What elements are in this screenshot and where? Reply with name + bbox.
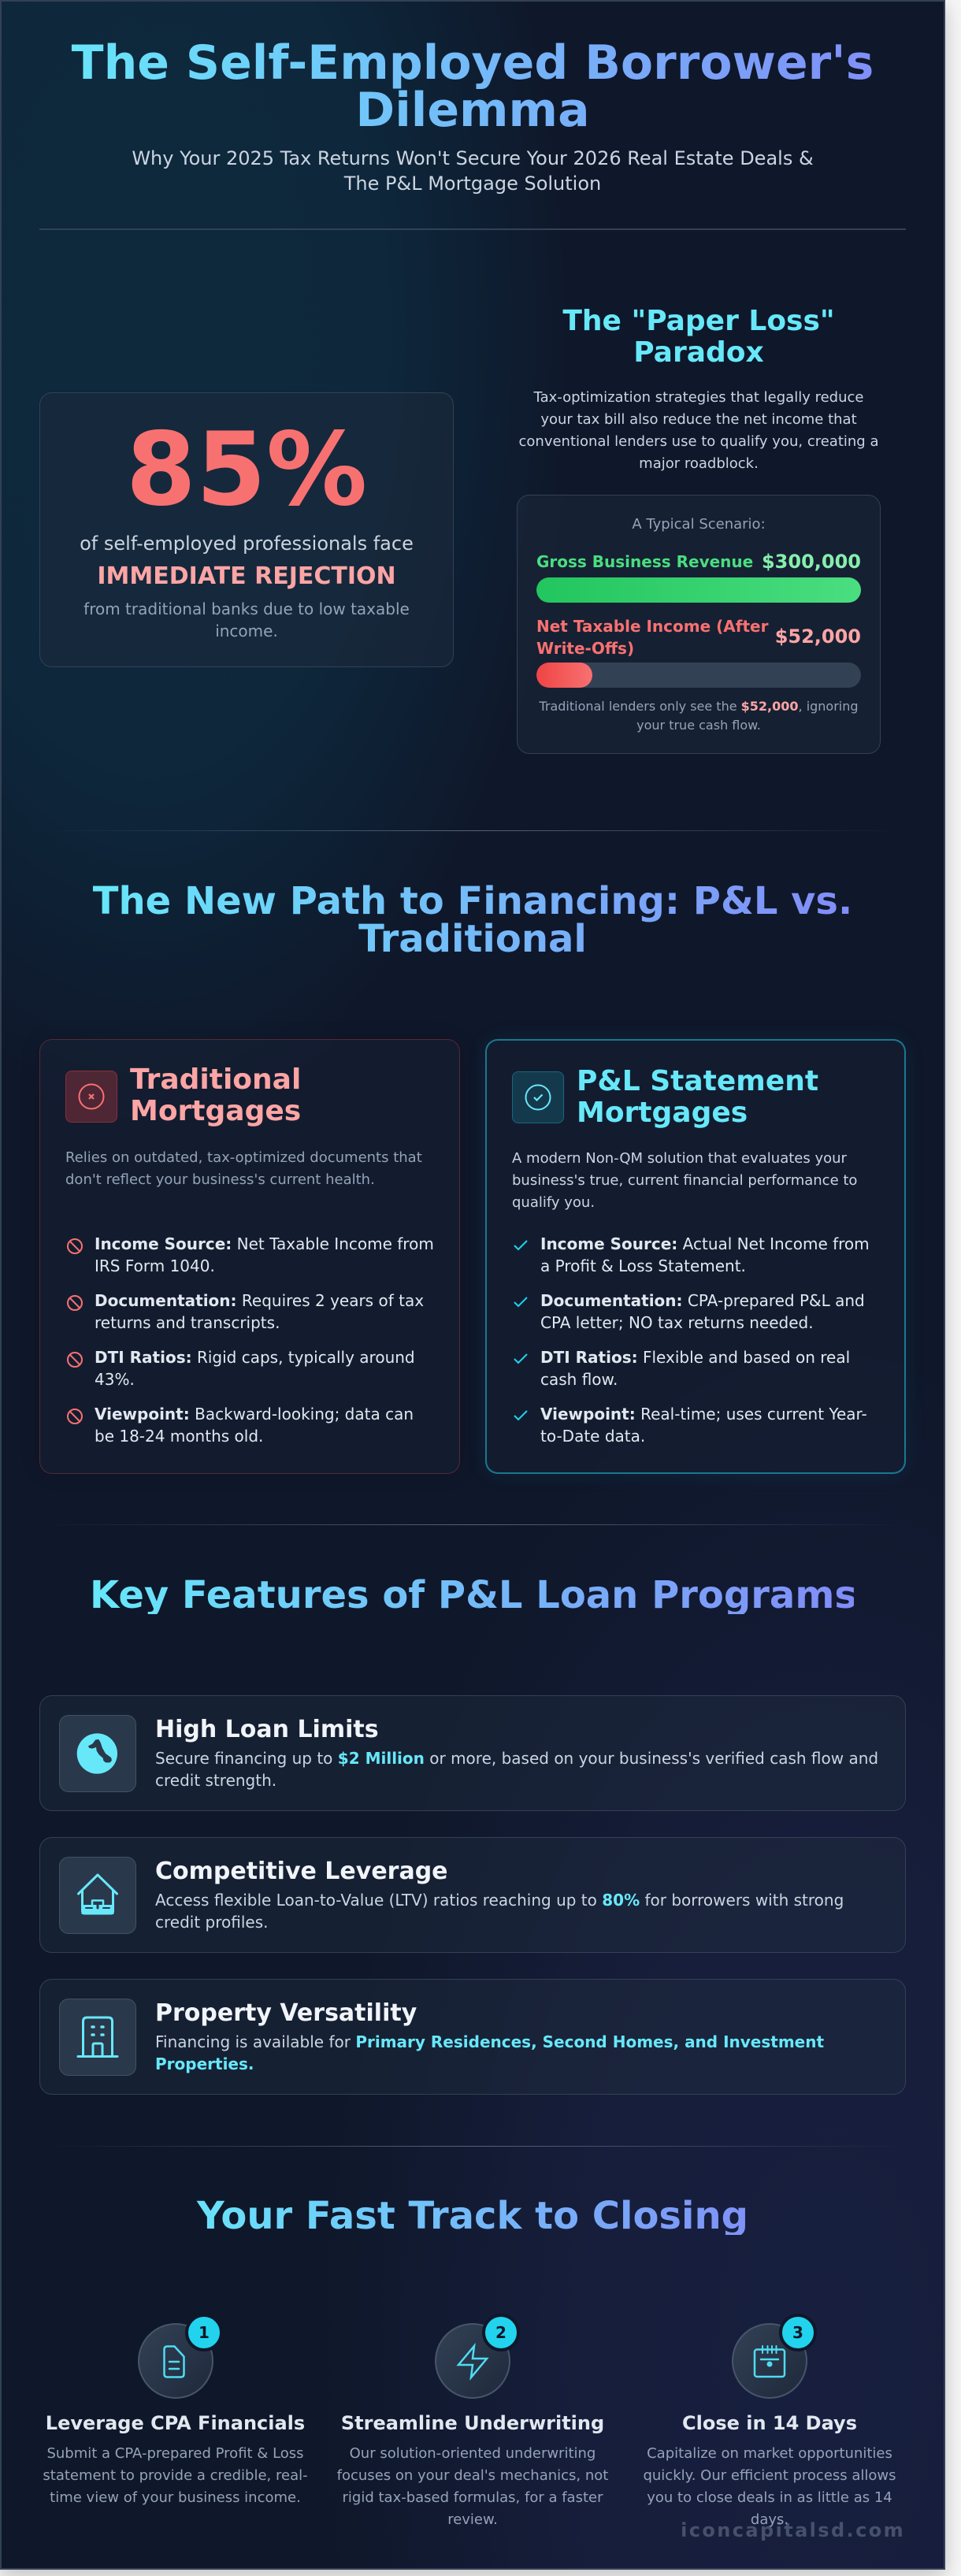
heading: new path to financing: The New Path to Financing: P&L vs.	[93, 879, 852, 923]
gross revenue value: $300,000	[762, 551, 861, 573]
feature description	[155, 1891, 844, 1932]
list item: income source	[540, 1234, 870, 1275]
net income label: Net Taxable Income (After	[536, 617, 768, 636]
feature title: Competitive Leverage	[155, 1858, 448, 1885]
statistic note	[83, 599, 410, 640]
list item: dti ratios	[95, 1348, 415, 1389]
feature description: Properties.	[155, 2054, 254, 2073]
scenario footnote: Traditional lenders only see the $52,000, ignoring	[539, 699, 859, 714]
gross revenue bar	[536, 577, 861, 603]
icon: check circle	[512, 1071, 564, 1123]
card title	[577, 1065, 818, 1129]
icon: check	[514, 1297, 528, 1308]
card description: A modern Non-QM solution that evaluates your	[512, 1150, 847, 1167]
heading: paper loss paradox: The "Paper Loss"	[562, 305, 835, 337]
step 3 badge	[779, 2314, 817, 2351]
panel: typical scenario	[517, 495, 881, 754]
title: Dilemma	[355, 83, 590, 138]
card title: P&L Statement	[577, 1065, 818, 1097]
list item: viewpoint: to-Date data.	[540, 1427, 645, 1446]
step 2 badge	[482, 2314, 520, 2351]
feature description	[155, 1749, 878, 1790]
icon: ban	[67, 1352, 83, 1368]
panel: traditional mortgages	[39, 1039, 460, 1474]
list item: dti ratios: cash flow.	[540, 1370, 618, 1389]
text: paradox explanation	[518, 389, 878, 472]
heading: fast track: Your Fast Track to Closing	[197, 2194, 748, 2238]
step 3 title: Close in 14 Days	[682, 2412, 857, 2434]
step 2 icon circle	[435, 2323, 510, 2399]
list item: documentation: Documentation: CPA-prepared P&L and	[540, 1291, 865, 1310]
step 2 description	[337, 2445, 608, 2528]
icon: check	[514, 1353, 528, 1364]
panel: p&l statement mortgages	[485, 1039, 906, 1474]
step 3 icon circle	[732, 2323, 807, 2399]
step 2 description: focuses on your deal's mechanics, not	[337, 2467, 608, 2484]
big statistic: 85%	[126, 411, 367, 529]
icon: building	[59, 1999, 136, 2076]
feature description: Access flexible Loan-to-Value (LTV) ratios reaching up to 80% for borrowers with strong	[155, 1891, 844, 1910]
list item: income source: Income Source: Net Taxable Income from	[95, 1234, 434, 1253]
card description	[65, 1149, 422, 1188]
step 2 description: Our solution-oriented underwriting	[350, 2445, 596, 2462]
panel: property versatility	[39, 1979, 906, 2095]
card title	[130, 1063, 301, 1127]
card title: Traditional	[130, 1063, 301, 1096]
list item: documentation	[95, 1291, 424, 1332]
icon: ban	[67, 1295, 83, 1311]
feature title: Property Versatility	[155, 1999, 417, 2027]
card description: business's true, current financial performance to	[512, 1172, 857, 1189]
panel: 85% statistic card	[39, 392, 454, 667]
icon: globe	[59, 1715, 136, 1792]
list item: income source: Income Source: Actual Net Income from	[540, 1234, 870, 1253]
feature description: Secure financing up to $2 Million or more, based on your business's verified cash flow and	[155, 1749, 878, 1768]
icon: ban	[67, 1238, 83, 1254]
list item: viewpoint	[95, 1405, 414, 1446]
step 3 description: quickly. Our efficient process allows	[643, 2467, 896, 2484]
card description	[512, 1150, 857, 1211]
text: paradox explanation: conventional lenders use to qualify you, creating a	[518, 433, 878, 450]
step 1 description: Submit a CPA-prepared Profit & Loss	[46, 2445, 304, 2462]
text: paradox explanation: your tax bill also reduce the net income that	[540, 411, 857, 428]
card title: Mortgages	[130, 1095, 301, 1127]
list item: viewpoint: be 18-24 months old.	[95, 1427, 263, 1446]
panel: high loan limits	[39, 1695, 906, 1811]
title: The Self-Employed Borrower's	[72, 35, 874, 91]
watermark: iconcapitalsd.com	[681, 2519, 905, 2541]
step 3 description	[643, 2445, 896, 2528]
subtitle	[132, 147, 814, 195]
list item: income source: IRS Form 1040.	[95, 1256, 215, 1275]
card description: don't reflect your business's current health.	[65, 1171, 375, 1188]
heading: paper loss paradox	[562, 305, 835, 369]
text: paradox explanation: major roadblock.	[639, 455, 759, 472]
step 2 description: review.	[447, 2511, 498, 2528]
icon: check	[514, 1240, 528, 1251]
list item: viewpoint	[540, 1405, 867, 1446]
step 1 badge	[185, 2314, 223, 2351]
step 2 title: Streamline Underwriting	[341, 2412, 604, 2434]
step 3 description: days.	[751, 2511, 788, 2528]
feature description: Financing is available for Primary Residences, Second Homes, and Investment	[155, 2032, 824, 2051]
subtitle: Why Your 2025 Tax Returns Won't Secure Your 2026 Real Estate Deals &	[132, 147, 814, 169]
list item: income source: a Profit & Loss Statement.	[540, 1256, 746, 1275]
list item: documentation	[540, 1291, 865, 1332]
icon: x circle	[65, 1071, 117, 1123]
step 2 badge: 2	[495, 2323, 506, 2342]
scenario footnote	[539, 699, 859, 733]
step 3 description: you to close deals in as little as 14	[647, 2489, 892, 2506]
step 1 badge: 1	[199, 2323, 210, 2342]
list item: dti ratios: 43%.	[95, 1370, 135, 1389]
icon: house	[59, 1857, 136, 1934]
immediate rejection callout: IMMEDIATE REJECTION	[97, 562, 396, 590]
step 1 description	[43, 2445, 308, 2506]
net income bar	[536, 663, 861, 688]
title	[39, 39, 906, 134]
feature description	[155, 2032, 824, 2073]
step 1 description: statement to provide a credible, real-	[43, 2467, 308, 2484]
step 3 description: Capitalize on market opportunities	[647, 2445, 892, 2462]
list item: dti ratios: DTI Ratios: Flexible and based on real	[540, 1348, 850, 1367]
heading: new path to financing: Traditional	[358, 917, 587, 961]
step 1 title: Leverage CPA Financials	[46, 2412, 305, 2434]
gross revenue label: Gross Business Revenue	[536, 552, 753, 571]
list item: income source	[95, 1234, 434, 1275]
list item: viewpoint: Viewpoint: Backward-looking; data can	[95, 1405, 414, 1423]
heading: new path to financing	[91, 882, 855, 958]
net income label: Write-Offs)	[536, 639, 634, 658]
card description: qualify you.	[512, 1194, 595, 1211]
feature description: credit profiles.	[155, 1913, 268, 1932]
step 3 badge: 3	[792, 2323, 803, 2342]
card description: Relies on outdated, tax-optimized documents that	[65, 1149, 422, 1166]
feature title: High Loan Limits	[155, 1716, 379, 1743]
list item: viewpoint: Viewpoint: Real-time; uses current Year-	[540, 1405, 867, 1423]
text: paradox explanation: Tax-optimization strategies that legally reduce	[534, 389, 863, 406]
list item: dti ratios: DTI Ratios: Rigid caps, typically around	[95, 1348, 415, 1367]
net income value: $52,000	[775, 625, 861, 648]
step 1 description: time view of your business income.	[50, 2489, 301, 2506]
statistic caption: of self-employed professionals face	[80, 533, 414, 555]
list item: documentation: returns and transcripts.	[95, 1313, 280, 1332]
statistic note: income.	[215, 622, 278, 640]
heading: key features: Key Features of P&L Loan Programs	[90, 1573, 857, 1617]
list item: documentation: Documentation: Requires 2 years of tax	[95, 1291, 424, 1310]
list item: documentation: CPA letter; NO tax returns needed.	[540, 1313, 814, 1332]
feature description: credit strength.	[155, 1771, 276, 1790]
heading: paper loss paradox: Paradox	[633, 336, 764, 369]
icon: ban	[67, 1409, 83, 1424]
subtitle: The P&L Mortgage Solution	[344, 173, 601, 195]
statistic note: from traditional banks due to low taxable	[83, 599, 410, 618]
icon: check	[514, 1410, 528, 1421]
net income label	[536, 617, 769, 658]
scenario label: A Typical Scenario:	[632, 516, 766, 533]
step 2 description: rigid tax-based formulas, for a faster	[342, 2489, 603, 2506]
step 1 icon circle	[138, 2323, 213, 2399]
panel: competitive leverage	[39, 1837, 906, 1953]
card title: Mortgages	[577, 1097, 748, 1129]
scenario footnote: your true cash flow.	[636, 718, 761, 733]
list item: dti ratios	[540, 1348, 850, 1389]
